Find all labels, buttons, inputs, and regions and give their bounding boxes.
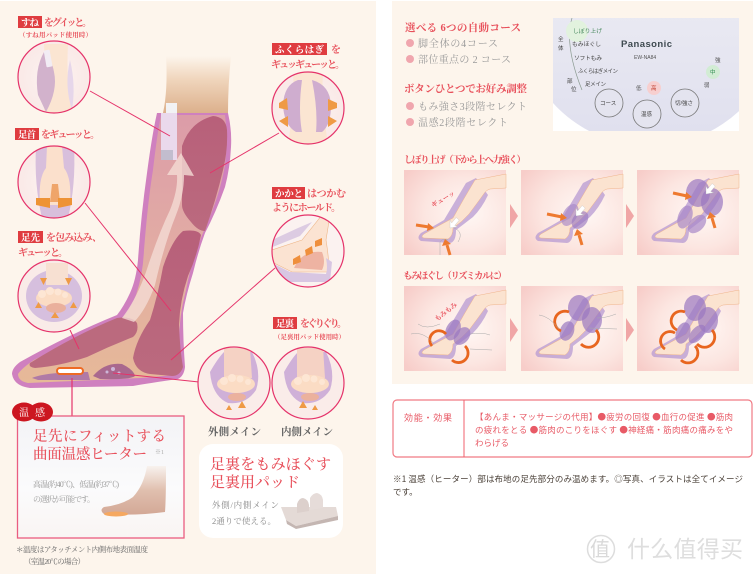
- label: calf: ふくらはぎ: [275, 44, 324, 56]
- heater heading: 足先にフィットする: [33, 428, 166, 445]
- badge: warmth: 温感: [19, 406, 46, 419]
- footnote: heater and images: ※1 温感（ヒーター）部は布地の足先部分のみ温めます。◎写真、イラストは全てイメージ: [393, 473, 743, 485]
- photo: remote controller: しぼり上げ: [573, 27, 602, 35]
- label: shin: [18, 16, 92, 39]
- pad on shin: [161, 103, 177, 160]
- circle: inner-main sole: [272, 347, 344, 419]
- photo: remote controller: ふくらはぎメイン: [578, 67, 618, 75]
- section: auto courses: 選べる 6つの自動コース: [405, 21, 521, 34]
- photo: remote controller: ソフトもみ: [574, 55, 602, 62]
- table: effects: [393, 400, 752, 457]
- heater heading: [33, 428, 166, 463]
- arrow: squeeze step 1 to 2: [510, 204, 518, 228]
- circle: outer-main sole: [198, 347, 270, 419]
- photo: remote controller: 高: [651, 84, 657, 92]
- heater glow on foot: [104, 512, 128, 516]
- panel: sole pad: 2通りで使える。: [212, 516, 276, 526]
- heading: rhythmic kneading: もみほぐし（リズミカルに）: [403, 270, 507, 282]
- panel: knead step 2: [521, 286, 623, 371]
- photo: remote controller: 全: [558, 35, 564, 43]
- panel: left background: [0, 1, 376, 574]
- panel: squeeze step 1: [404, 170, 506, 255]
- section: one-button adjust: [404, 82, 528, 129]
- watermark: 值: [590, 538, 610, 561]
- heater text: 高温(約40℃)、低温(約37℃): [33, 479, 119, 489]
- callout lines: [70, 91, 279, 416]
- label: toes: [18, 231, 102, 259]
- panel: knead step 1: [404, 286, 506, 371]
- illustration: leg with massager: [12, 56, 231, 388]
- section: one-button adjust: 温感2段階セレクト: [418, 116, 508, 129]
- label: sole: [273, 317, 347, 341]
- panel: right background: [392, 1, 753, 384]
- table: effects: 【あんま・マッサージの代用】●疲労の回復 ●血行の促進 ●筋肉: [475, 411, 733, 423]
- label: sole: をぐりぐり。: [300, 318, 347, 330]
- circle: heel: [270, 215, 344, 287]
- label: heel: かかと: [275, 189, 303, 200]
- photo: remote controller: 部: [567, 78, 573, 85]
- foot photo: [102, 466, 166, 515]
- label: shin: すね: [21, 18, 39, 29]
- panel: sole pad: 外側/内側メイン: [212, 500, 279, 510]
- sole pads: [32, 364, 135, 380]
- panel: squeeze step 3: [637, 170, 739, 255]
- footnote: temperature: [16, 544, 148, 566]
- label: ankle: 足首: [18, 129, 36, 141]
- label: sole: 足裏: [276, 318, 294, 330]
- label: ankle: [15, 128, 100, 141]
- photo: remote controller: 温感: [641, 110, 653, 118]
- table: effects: 効能・効果: [404, 411, 452, 424]
- photo: remote controller: 体: [558, 44, 564, 52]
- label: heel: ようにホールド。: [272, 202, 341, 214]
- section: auto courses: [405, 21, 521, 66]
- photo: remote controller: 足メイン: [585, 81, 606, 88]
- panel: squeeze step 1: ギューッ: [430, 189, 456, 209]
- caption: outer main: 外側メイン: [208, 425, 261, 438]
- circle: toes: [18, 260, 90, 332]
- footnote: temperature: （室温20℃の場合）: [24, 556, 85, 566]
- arrow: knead step 2 to 3: [626, 318, 634, 342]
- photo: remote controller: もみほぐし: [572, 41, 601, 48]
- circle: shin: [18, 41, 90, 113]
- photo: remote controller: 弱: [704, 82, 710, 89]
- caption: inner main: 内側メイン: [281, 425, 333, 438]
- section: one-button adjust: ボタンひとつでお好み調整: [404, 82, 528, 95]
- label: calf: [271, 43, 345, 71]
- toe bladder: [30, 318, 137, 368]
- footnote: heater and images: [393, 473, 743, 498]
- photo: remote controller: EW-NA84: [634, 55, 656, 61]
- label: ankle: をギューッと。: [41, 129, 100, 141]
- label: heel: はつかむ: [307, 188, 346, 200]
- circle: ankle: [18, 146, 90, 218]
- photo: remote controller: Panasonic: [621, 39, 672, 50]
- panel: sole pad: 足裏用パッド: [210, 473, 300, 491]
- heater heading: ※1: [155, 449, 164, 456]
- panel: knead step 1: もみもみ: [433, 300, 459, 323]
- table: effects: わらげる: [475, 437, 509, 449]
- leg inner: [18, 115, 226, 383]
- heater text: [33, 479, 119, 504]
- label: shin: （すね用パッド使用時）: [19, 30, 92, 39]
- photo: remote controller: [553, 18, 739, 131]
- label: toes: を包み込み、: [46, 231, 102, 244]
- footnote: temperature: ＊温度はアタッチメント内側布地表面温度: [16, 544, 148, 554]
- arrow: squeeze step 2 to 3: [626, 204, 634, 228]
- photo: remote controller: 切/強さ: [675, 99, 693, 107]
- calf bladder: [182, 116, 227, 231]
- footnote: heater and images: です。: [393, 486, 418, 498]
- heel bladder: [133, 230, 201, 376]
- section: auto courses: 部位重点の 2 コース: [418, 53, 511, 66]
- photo: remote controller: 中: [710, 68, 716, 76]
- photo: remote controller: コース: [600, 100, 616, 107]
- label: toes: 足先: [21, 232, 40, 244]
- icon: pad: [281, 493, 338, 529]
- section: one-button adjust: もみ強さ3段階セレクト: [418, 100, 527, 113]
- badge: warmth: [12, 402, 53, 422]
- heater heading: 曲面温感ヒーター: [33, 445, 147, 463]
- panel: squeeze step 2: [521, 170, 623, 255]
- heater text: の選択が可能です。: [33, 494, 95, 504]
- arrow: knead step 1 to 2: [510, 318, 518, 342]
- circle: calf: [272, 72, 344, 144]
- panel: knead step 3: [637, 286, 739, 371]
- label: calf: を: [331, 44, 341, 56]
- leg cuff outer: [12, 113, 231, 388]
- section: auto courses: 脚全体の4コース: [418, 37, 498, 50]
- label: shin: をグイッと。: [44, 16, 92, 29]
- panel: heater callout: [18, 416, 184, 538]
- label: sole: （足裏用パッド使用時）: [274, 332, 345, 341]
- label: toes: ギューッと。: [18, 247, 68, 259]
- panel: sole pad: [199, 444, 343, 538]
- heater: [57, 368, 83, 374]
- photo: remote controller: 低: [636, 84, 642, 92]
- label: heel: [272, 187, 346, 214]
- table: effects: の疲れをとる ●筋肉のこりをほぐす ●神経痛・筋肉痛の痛みをや: [475, 424, 733, 436]
- label: calf: ギュッギューッと。: [271, 59, 345, 71]
- panel: sole pad: 足裏をもみほぐす: [210, 455, 331, 473]
- heading: squeeze up: しぼり上げ（下から上へ力強く）: [404, 154, 526, 166]
- photo: remote controller: 位: [571, 85, 577, 93]
- upward arrow: [122, 153, 194, 322]
- watermark: 什么值得买: [627, 536, 743, 562]
- photo: remote controller: 強: [715, 56, 721, 64]
